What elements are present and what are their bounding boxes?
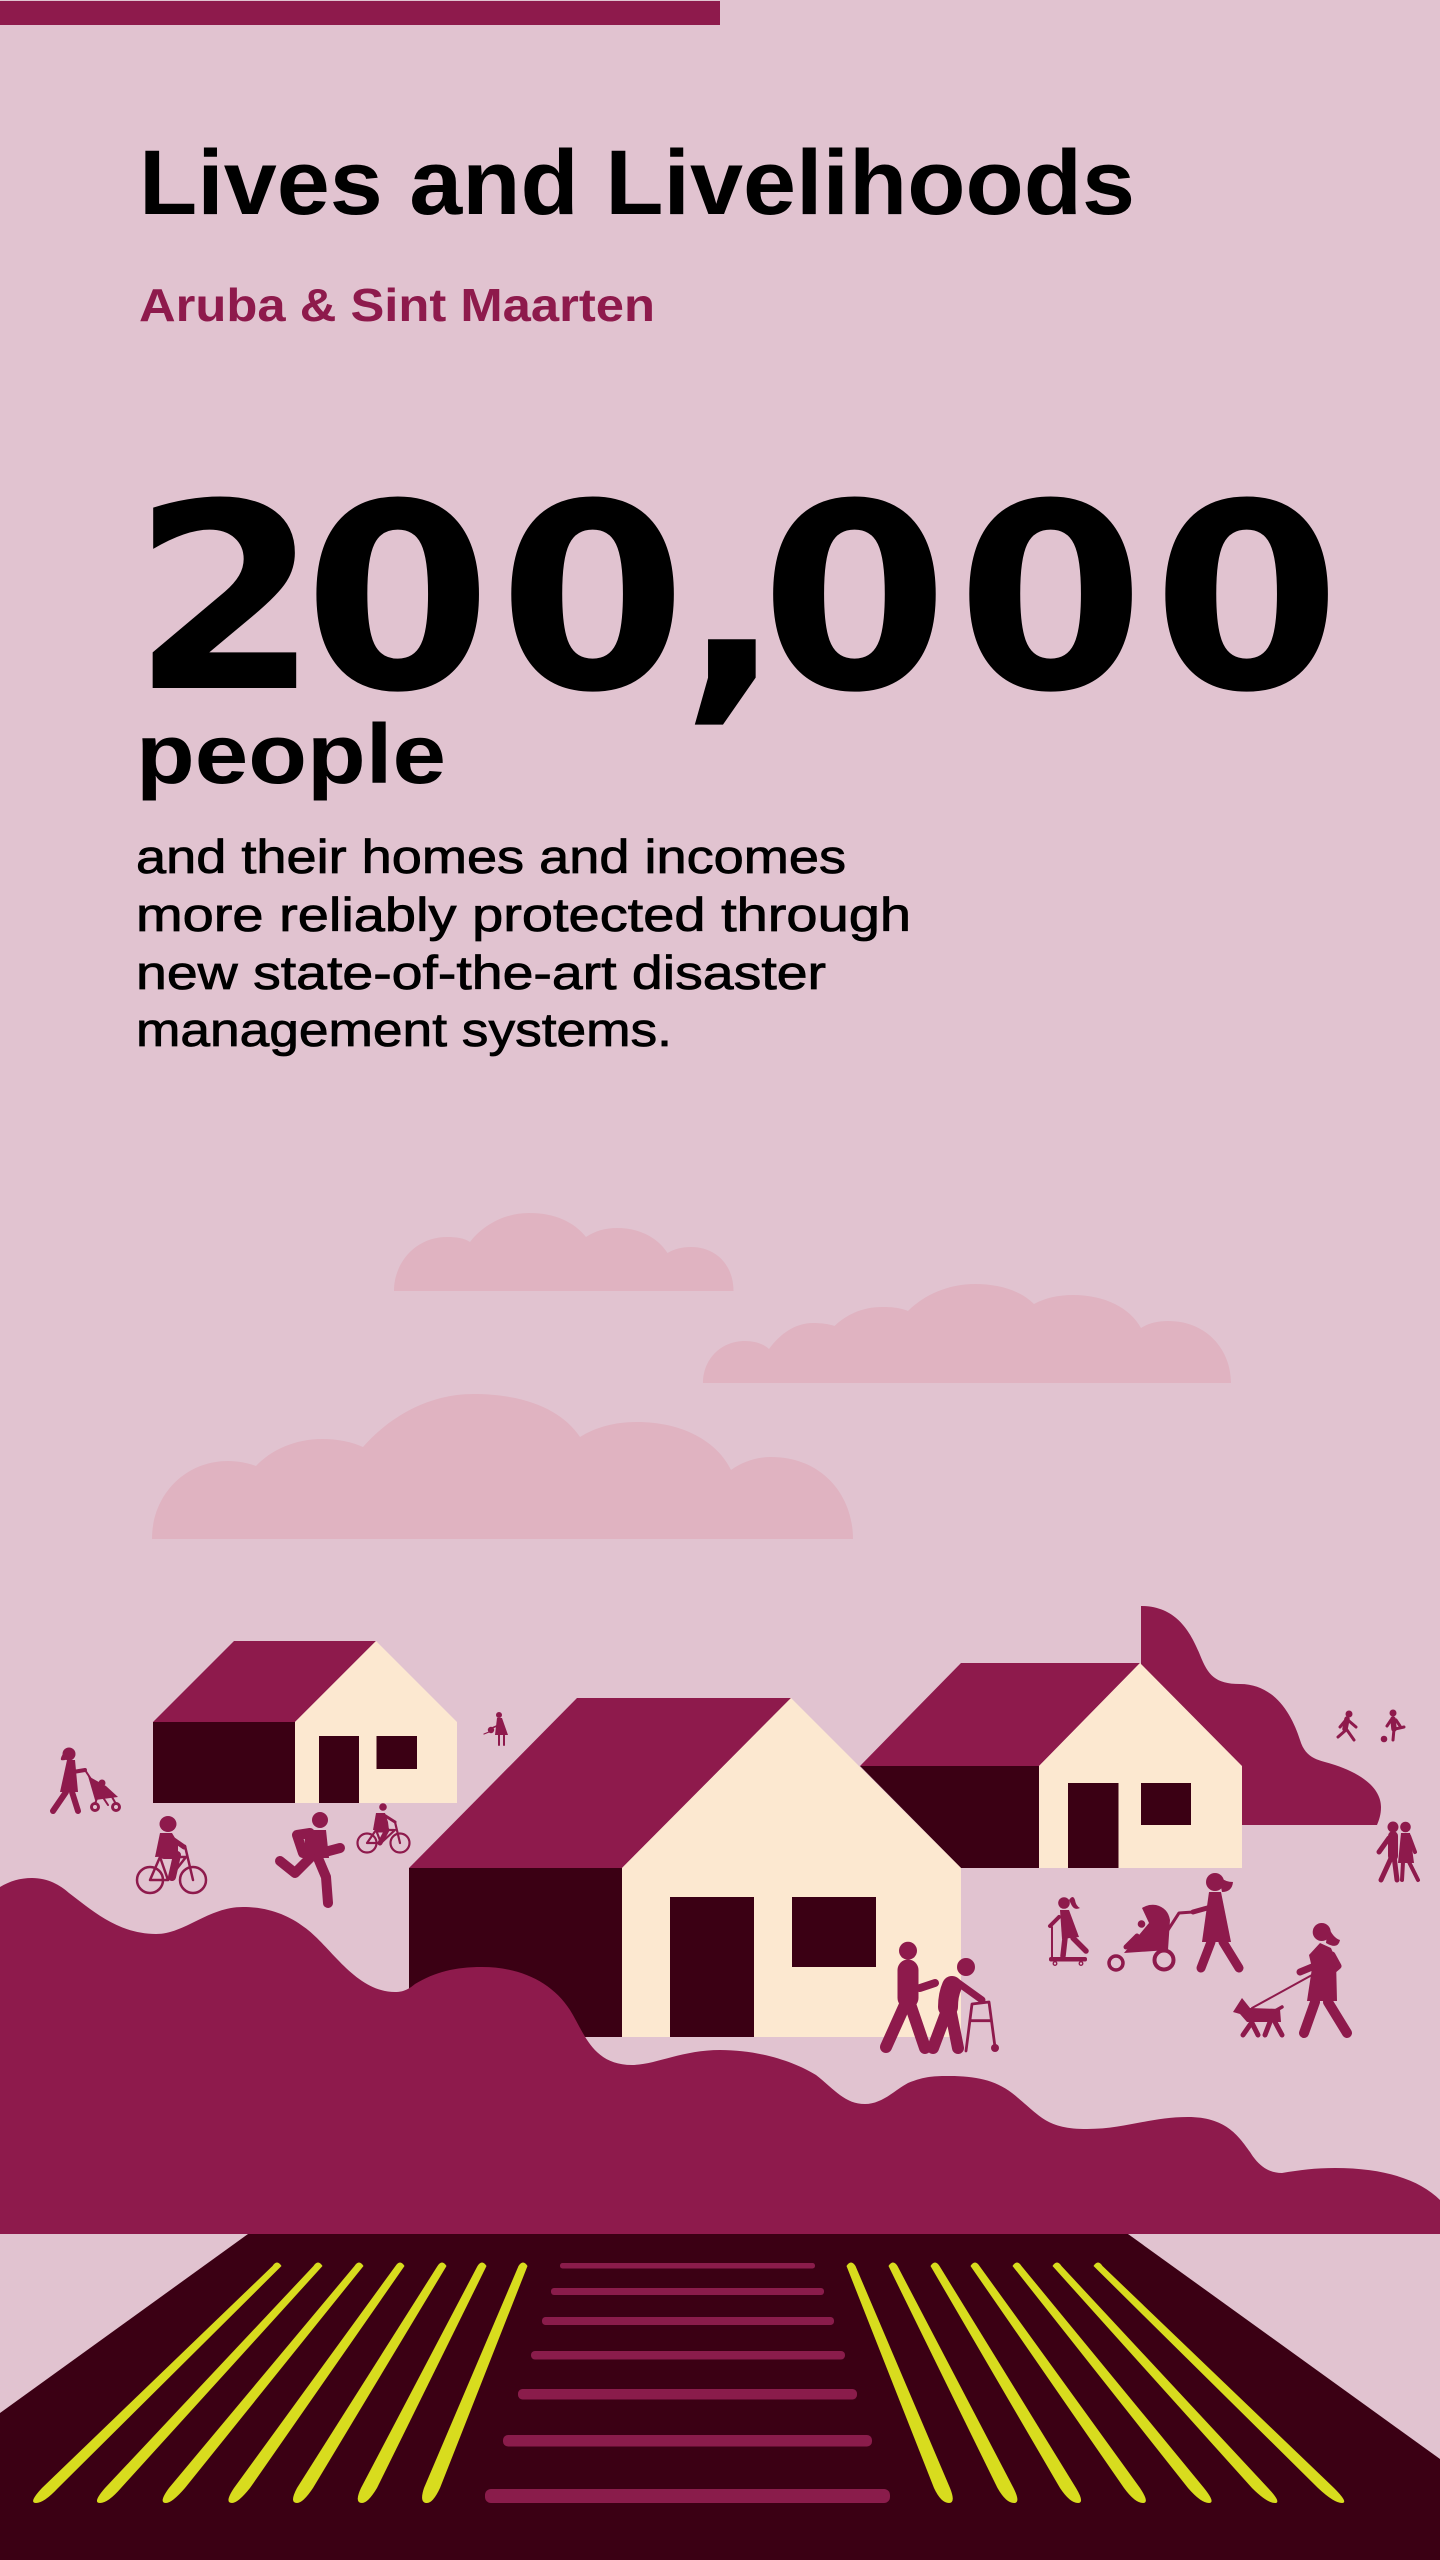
people label: people [136, 707, 446, 801]
cloud: bottom left [152, 1394, 853, 1539]
person: child kicking ball [1381, 1710, 1404, 1742]
person: elderly man with walker [933, 1958, 999, 2052]
house: right [860, 1663, 1242, 1868]
icon: dog [1233, 1998, 1282, 2035]
description text [136, 830, 911, 1056]
person: helper walking with elderly man [886, 1942, 935, 2048]
person: small cyclist [358, 1803, 410, 1852]
person: gardener with watering can [484, 1712, 508, 1745]
crop rows: yellow left [33, 2262, 527, 2503]
top accent bar [0, 1, 720, 25]
person: woman with stroller, left [53, 1748, 120, 1811]
subtitle: Aruba & Sint Maarten [139, 279, 655, 331]
crop rows: centre bars [485, 2263, 890, 2503]
house: small left [153, 1641, 457, 1803]
person: couple walking [1379, 1822, 1418, 1880]
foreground hill [0, 1878, 1440, 2234]
title: Lives and Livelihoods [139, 132, 1135, 234]
big number: 200,000 [131, 449, 1341, 749]
cloud: top [394, 1213, 734, 1291]
clouds [152, 1213, 1231, 1539]
background hill behind right house [1141, 1606, 1381, 1825]
cloud: right [703, 1284, 1231, 1383]
crop rows: yellow right [846, 2262, 1344, 2503]
people [53, 1710, 1418, 2052]
description text: and their homes and incomes [136, 830, 846, 883]
person: runner [280, 1812, 340, 1903]
field [0, 2234, 1440, 2560]
person: woman with large stroller [1109, 1873, 1239, 1970]
description text: new state-of-the-art disaster [136, 946, 826, 999]
person: woman walking dog [1252, 1923, 1347, 2033]
person: girl on scooter [1049, 1897, 1087, 1965]
description text: management systems. [136, 1003, 672, 1056]
person: child running [1338, 1710, 1356, 1740]
house: large centre [409, 1698, 961, 2037]
person: child on bicycle [137, 1816, 206, 1893]
description text: more reliably protected through [136, 888, 911, 941]
